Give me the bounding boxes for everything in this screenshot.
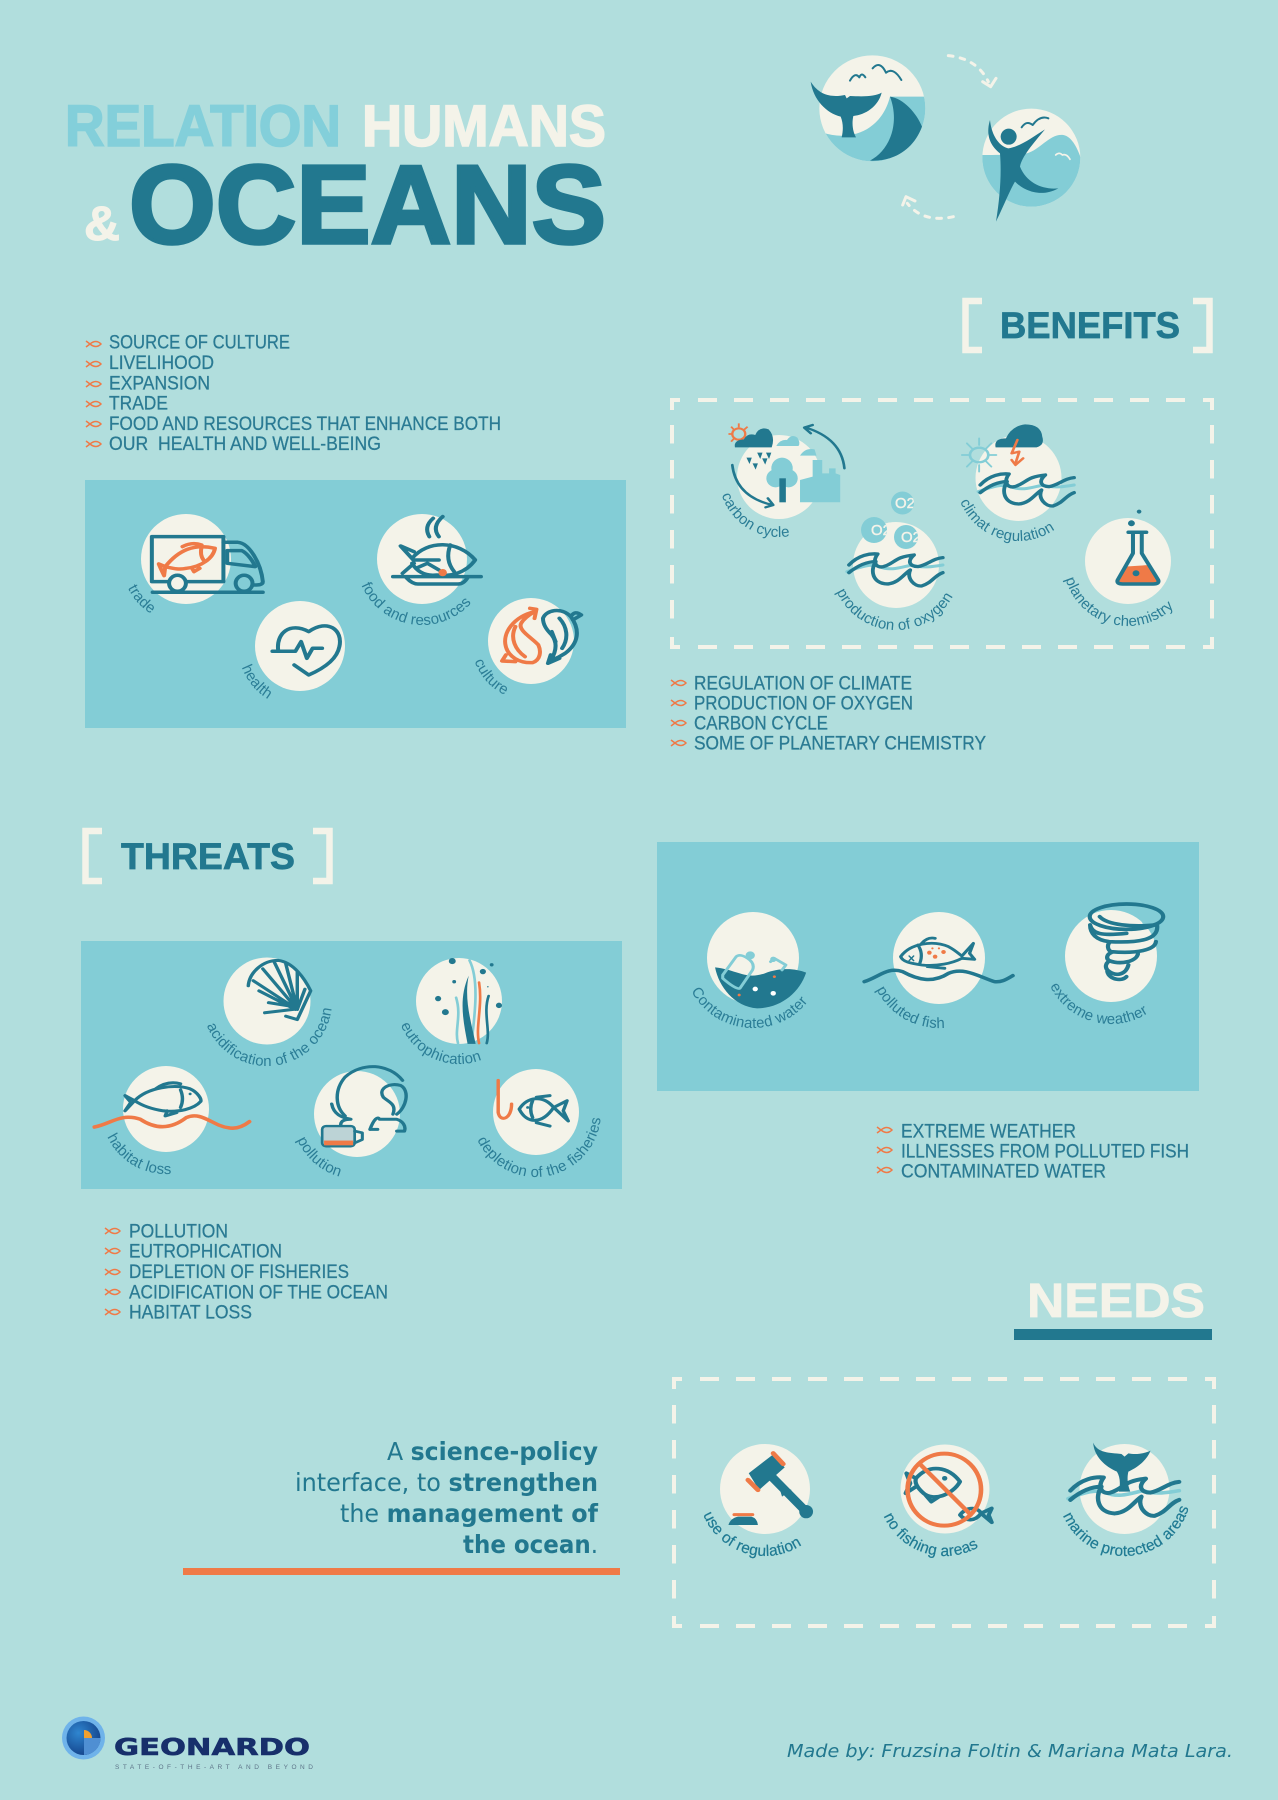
icon: climate regulation: climat regulation [961,500,1054,544]
title: & [84,198,120,251]
heading: needs: NEEDS [1027,1275,1205,1328]
icon: trade [128,514,265,612]
list: general benefits: TRADE [109,394,168,414]
list: general benefits: OUR HEALTH AND WELL-BEING [109,434,381,455]
list: benefits: CARBON CYCLE [694,714,828,734]
icon: acidification [208,958,332,1066]
icon: eutrophication: eutrophication [402,1023,481,1064]
list: general benefits: FOOD AND RESOURCES THAT ENHANCE BOTH [109,414,501,435]
icon: acidification: acidification of the ocean [208,1008,332,1066]
list: threats: ACIDIFICATION OF THE OCEAN [129,1282,388,1304]
icon: whale tail disc [811,55,930,167]
icon: trade: trade [128,584,154,612]
icon: production of oxygen: production of oxygen [834,588,952,630]
icon: polluted fish: polluted fish [874,986,944,1028]
icon: polluted fish [862,912,1015,1028]
list: threats: DEPLETION OF FISHERIES [129,1262,349,1283]
arrow: top dashed [948,56,996,87]
icon: production of oxygen: O2 [895,495,915,512]
panel: threats to humans [657,842,1199,1091]
icon: culture: culture [476,660,507,694]
list: benefits [671,674,986,754]
icon: planetary chemistry: planetary chemistry [1062,577,1172,626]
icon: no fishing areas: no fishing areas [884,1513,978,1558]
icon: culture [476,598,584,694]
panel: needs dashed box [672,1377,1216,1628]
heading: threats [86,831,330,881]
list: benefits: REGULATION OF CLIMATE [694,674,912,694]
icon: extreme weather: extreme weather [1051,984,1146,1024]
icon: climate regulation [961,424,1076,544]
panel: human benefits [85,480,626,728]
icon: health [242,601,345,699]
logo: Geonardo: GEONARDO [114,1735,310,1761]
icon: production of oxygen: O2 [901,529,921,546]
list: threats to humans [877,1122,1189,1182]
icon: whale and human cycle [811,55,1083,222]
title: RELATION [65,94,341,159]
title [65,94,606,267]
text block: science-policy statement: interface, to strengthen [295,1468,598,1497]
list: general benefits: LIVELIHOOD [109,353,214,374]
panel: threats to ocean [81,941,622,1189]
list: threats: EUTROPHICATION [129,1242,282,1262]
list: threats: HABITAT LOSS [129,1302,252,1324]
title: OCEANS [129,143,606,267]
icon: food and resources: food and resources [362,582,470,625]
icon: no fishing areas [884,1444,994,1558]
icon: use of regulation [704,1444,814,1558]
list: benefits: SOME OF PLANETARY CHEMISTRY [694,734,986,754]
heading: benefits: BENEFITS [1000,305,1180,346]
icon: planetary chemistry [1062,510,1172,626]
icon: contaminated water [693,912,806,1028]
heading: threats: THREATS [121,836,295,877]
text block: science-policy statement: the ocean. [463,1530,598,1559]
list: threats to humans: ILLNESSES FROM POLLUTED FISH [901,1142,1189,1162]
icon: depletion of fisheries [478,1069,600,1178]
icon: carbon cycle [722,423,846,538]
icon: habitat loss: habitat loss [108,1132,171,1174]
icon: production of oxygen: O2 [871,522,891,539]
icon: food and resources [362,514,483,625]
credit text: Made by: Fruzsina Foltin & Mariana Mata Lara. [787,1741,1233,1762]
icon: pollution: pollution [294,1137,341,1176]
icon: health: health [242,664,271,699]
list: general benefits: SOURCE OF CULTURE [109,332,290,354]
list: benefits: PRODUCTION OF OXYGEN [694,694,913,714]
text block: science-policy statement [183,1437,620,1575]
icon: pollution [294,1065,408,1176]
icon: extreme weather [1051,902,1166,1024]
logo: Geonardo: STATE-OF-THE-ART AND BEYOND [115,1764,313,1771]
icon: contaminated water: Contaminated water [693,988,806,1028]
text block: science-policy statement: A science-policy [387,1437,598,1466]
list: threats: POLLUTION [129,1222,228,1242]
list: threats [105,1222,388,1324]
list: threats to humans: CONTAMINATED WATER [901,1162,1106,1182]
text block: science-policy statement: the management of [340,1499,599,1528]
panel: benefits dashed box [670,398,1214,649]
icon: habitat loss [92,1066,252,1174]
logo: Geonardo [62,1716,313,1771]
heading: benefits [966,301,1210,350]
icon: use of regulation: use of regulation [704,1512,802,1558]
list: general benefits: EXPANSION [109,374,210,394]
list: threats to humans: EXTREME WEATHER [901,1122,1076,1142]
icon: marine protected areas: marine protected areas [1063,1506,1188,1556]
icon: carbon cycle: carbon cycle [722,494,789,538]
icon: human disc [980,109,1083,222]
title: HUMANS [362,94,606,159]
heading: needs [1014,1275,1212,1340]
icon: marine protected areas [1063,1442,1188,1556]
arrow: bottom dashed [903,197,953,218]
icon: production of oxygen [834,492,952,630]
icon: eutrophication [402,958,502,1064]
list: general benefits [86,332,501,455]
icon: depletion of fisheries: depletion of the fisheries [478,1118,600,1178]
